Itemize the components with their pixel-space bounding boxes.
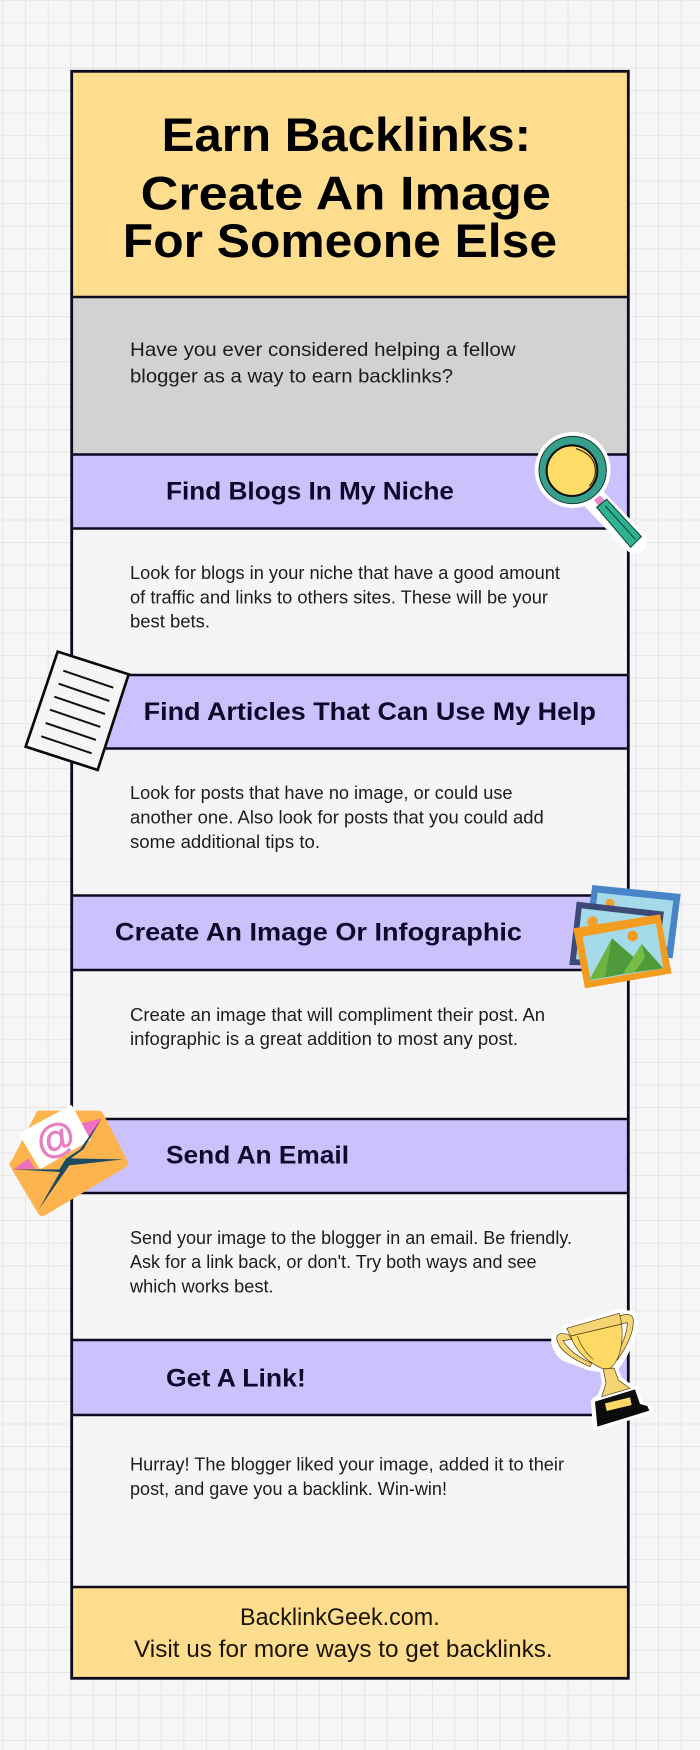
panel: intro [71,297,629,455]
icon: trophy [555,1313,649,1427]
heading: send email: Send An Email [166,1142,349,1170]
body: get a link: Hurray! The blogger liked your image, added it to their [130,1455,564,1475]
heading: find blogs: Find Blogs In My Niche [166,477,454,505]
body: find blogs [130,563,560,632]
body: find articles: Look for posts that have no image, or could use [130,783,512,803]
body: get a link: post, and gave you a backlink. Win-win! [130,1479,447,1499]
title [123,108,557,267]
body: find blogs: of traffic and links to others sites. These will be your [130,587,548,607]
body: send email: Ask for a link back, or don't. Try both ways and see [130,1252,537,1272]
body: create image: infographic is a great addition to most any post. [130,1029,518,1049]
footer text [134,1604,553,1663]
body: find blogs: Look for blogs in your niche that have a good amount [130,563,560,583]
icon: magnifying glass [535,432,641,547]
body: create image: Create an image that will compliment their post. An [130,1005,545,1025]
panel: step 4 send email [71,1119,629,1340]
heading: find articles: Find Articles That Can Use My Help [144,698,596,726]
body: send email: Send your image to the blogger in an email. Be friendly. [130,1228,572,1248]
icon: pictures [569,885,681,988]
icon: envelope [10,1105,128,1216]
heading: get a link: Get A Link! [166,1364,306,1392]
body: find articles: another one. Also look for posts that you could add [130,808,544,828]
icon: envelope: @ [30,1112,81,1166]
intro text: blogger as a way to earn backlinks? [130,366,453,388]
intro text: Have you ever considered helping a fellow [130,339,517,361]
panel: step 3 create image [71,896,629,1119]
body: send email: which works best. [129,1277,274,1297]
icon: document [26,652,129,770]
footer text: Visit us for more ways to get backlinks. [134,1636,553,1663]
panel: step 2 find articles [71,675,629,896]
title: Create An Image [141,167,551,220]
body: find blogs: best bets. [130,612,210,632]
title: Earn Backlinks: [162,108,531,161]
footer text: BacklinkGeek.com. [240,1604,440,1631]
heading: create image: Create An Image Or Infographic [115,919,522,947]
body: find articles [130,783,544,852]
panel: step 5 get a link [71,1340,629,1587]
body: send email [129,1228,572,1297]
body: find articles: some additional tips to. [130,832,320,852]
intro text [130,339,517,388]
title: For Someone Else [123,214,557,267]
panel: step 1 find blogs [71,455,629,675]
body: get a link [130,1455,564,1499]
body: create image [130,1005,545,1049]
panel: title [71,71,629,297]
panel: footer [71,1587,629,1678]
